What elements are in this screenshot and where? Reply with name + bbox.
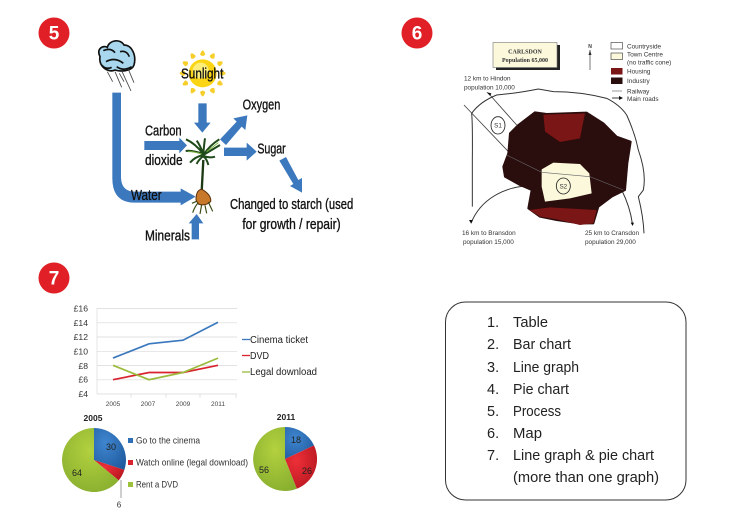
map labels: population 15,000 — [463, 239, 514, 246]
north arrow: N — [588, 44, 592, 50]
pie chart: 2011: 56 — [259, 465, 269, 475]
badge: 6 — [402, 18, 432, 48]
zone: industry — [503, 112, 631, 223]
panel: list of graph types: 3. — [487, 360, 499, 376]
panel: list of graph types: Process — [513, 404, 561, 420]
pie legend — [128, 436, 248, 490]
pie chart: 2005 — [62, 413, 126, 510]
label: sunlight: Sunlight — [181, 67, 223, 83]
label: oxygen: Oxygen — [243, 97, 280, 113]
icon: plant — [186, 138, 220, 214]
label: carbon: Carbon — [145, 123, 182, 139]
map labels: population 10,000 — [464, 84, 515, 92]
pie chart: 2005: 30 — [106, 442, 116, 452]
badge: 5 — [38, 18, 70, 48]
pie legend: Go to the cinema — [136, 436, 200, 446]
x axis labels: 2005 — [106, 401, 121, 408]
arrow: minerals to plant — [189, 214, 203, 239]
panel: list of graph types: Table — [513, 315, 548, 331]
series: DVD — [113, 365, 218, 380]
series: legal download — [113, 358, 218, 380]
label: S1: S1 — [494, 123, 502, 130]
north arrow — [588, 44, 592, 70]
map legend: Industry — [627, 78, 651, 85]
line chart legend: DVD — [250, 351, 269, 362]
pie legend: Rent a DVD — [136, 480, 178, 490]
icon: sun — [180, 50, 226, 96]
badge: 6: 6 — [412, 24, 422, 44]
map labels: population 29,000 — [585, 239, 636, 246]
panel: list of graph types: Map — [513, 426, 542, 442]
map: Carlsdon — [462, 42, 671, 246]
icon: rain cloud — [99, 41, 135, 91]
x axis labels: 2011 — [211, 401, 225, 408]
process diagram: photosynthesis — [99, 41, 353, 245]
zone: town centre — [542, 163, 592, 202]
line chart legend — [242, 335, 317, 378]
badge: 7: 7 — [49, 268, 59, 290]
panel: list of graph types: 4. — [487, 382, 499, 398]
map title box: Population 65,000 — [502, 58, 548, 64]
arrow: sunlight to plant — [194, 103, 211, 133]
map labels — [462, 76, 639, 246]
line chart legend: Cinema ticket — [250, 335, 308, 346]
map legend: Main roads — [627, 96, 659, 103]
panel: list of graph types — [446, 302, 686, 500]
map title box: CARLSDON — [508, 50, 543, 56]
y axis labels: £16 — [74, 304, 88, 314]
panel: list of graph types: (more than one graph) — [513, 470, 659, 486]
label: S2 — [556, 178, 570, 194]
map legend: Railway — [627, 88, 650, 96]
y axis labels: £6 — [78, 374, 88, 384]
label: for growth: for growth / repair) — [242, 217, 341, 233]
panel: list of graph types: 7. — [487, 448, 499, 464]
panel: list of graph types: Line graph — [513, 360, 579, 376]
map legend: Countryside — [627, 44, 662, 50]
map drawing — [464, 89, 644, 233]
map labels: 25 km to Cransdon — [585, 230, 639, 237]
x axis labels — [106, 401, 225, 408]
y axis labels — [74, 304, 88, 399]
map legend: Housing — [627, 68, 651, 76]
label: changed to starch: Changed to starch (used — [230, 197, 353, 213]
x axis labels: 2009 — [176, 401, 191, 408]
pie chart: 2005: 2005 — [84, 413, 103, 423]
pie chart: 2011 — [253, 412, 317, 491]
y axis labels: £10 — [74, 346, 88, 356]
map legend: (no traffic cone) — [627, 60, 671, 66]
pie chart: 2005: 6 — [117, 500, 122, 510]
x axis labels: 2007 — [141, 401, 156, 408]
pie chart: 2011: 26 — [302, 466, 312, 476]
y axis labels: £14 — [74, 318, 88, 328]
y axis labels: £4 — [78, 389, 88, 399]
label: dioxide: dioxide — [145, 153, 183, 169]
label: sugar: Sugar — [257, 141, 286, 157]
panel: list of graph types: Bar chart — [513, 337, 571, 353]
panel: list of graph types: 2. — [487, 337, 499, 353]
pie chart: 2005: 64 — [72, 468, 82, 478]
panel: list of graph types: 5. — [487, 404, 499, 420]
panel: list of graph types: Line graph & pie chart — [513, 448, 654, 464]
badge: 7 — [38, 262, 70, 294]
pie chart: 2011: 2011 — [277, 412, 295, 422]
panel: list of graph types: Pie chart — [513, 382, 569, 398]
map labels: 16 km to Bransdon — [462, 230, 516, 237]
map legend — [611, 42, 671, 103]
label: water: Water — [131, 188, 162, 204]
zone: housing south — [529, 207, 597, 225]
arrow: to sugar — [224, 143, 257, 161]
zone: housing north — [543, 113, 585, 142]
arrow: water — [112, 93, 196, 205]
label: S1 — [491, 117, 505, 134]
panel: list of graph types: 1. — [487, 315, 499, 331]
label: S2: S2 — [559, 183, 568, 190]
panel: list of graph types: 6. — [487, 426, 499, 442]
y axis labels: £8 — [78, 361, 88, 371]
line chart legend: Legal download — [250, 367, 317, 378]
map legend: Town Centre — [627, 52, 663, 58]
pie legend: Watch online (legal download) — [136, 458, 248, 468]
line chart — [74, 304, 317, 408]
map title box — [493, 42, 560, 70]
arrow: carbon dioxide to plant — [144, 138, 187, 153]
badge: 5: 5 — [49, 24, 60, 44]
pie chart: 2011: 18 — [291, 435, 301, 445]
arrow: to oxygen — [220, 115, 247, 145]
label: minerals: Minerals — [145, 229, 190, 245]
arrow: sugar to starch — [279, 157, 302, 193]
y axis labels: £12 — [74, 332, 88, 342]
series: cinema ticket — [113, 322, 218, 358]
map labels: 12 km to Hindon — [464, 76, 511, 82]
